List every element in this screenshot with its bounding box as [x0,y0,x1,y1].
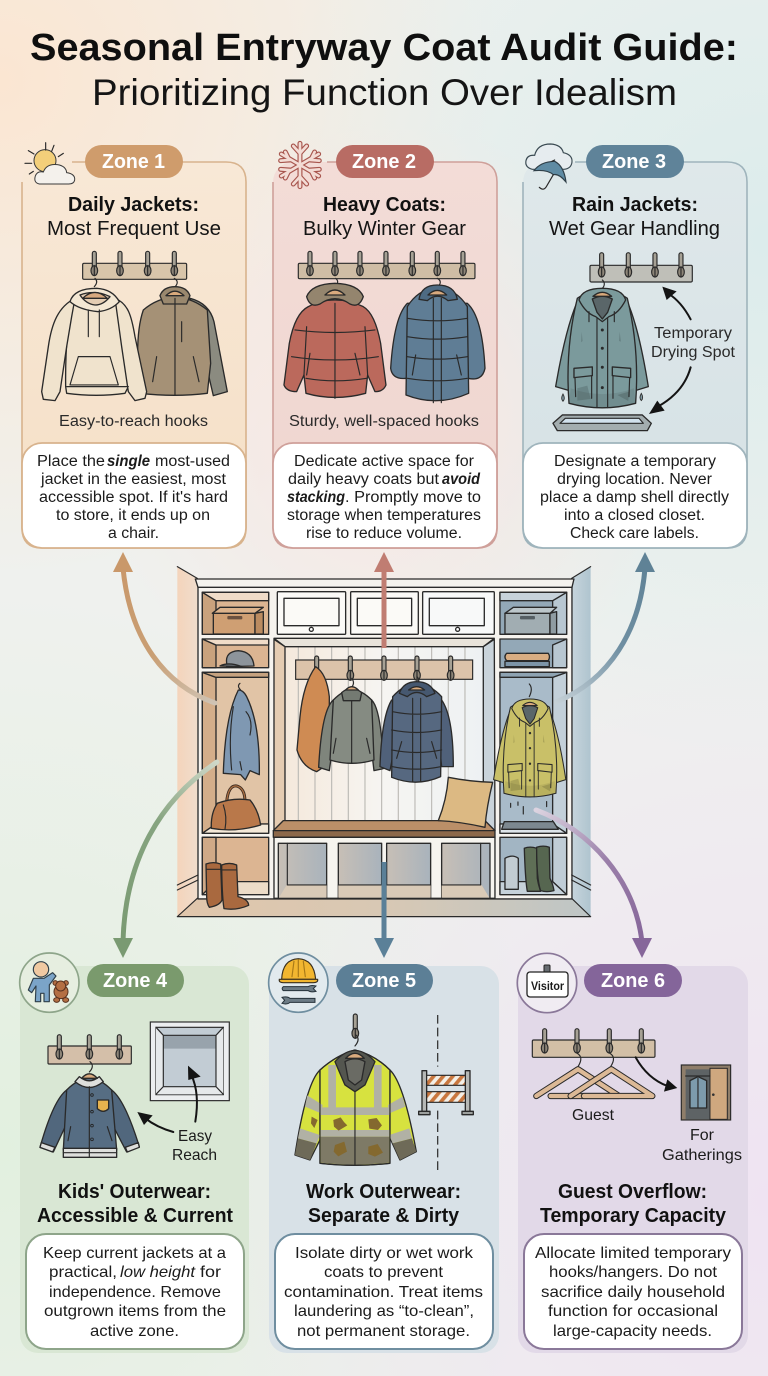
zone 4 message: for [200,1264,222,1281]
zone 1 heading: Daily Jackets: [68,193,199,216]
illustration: hook rail with hoodie and jacket [42,251,227,401]
easy reach label: Easy [178,1128,212,1145]
zone 5 message: laundering as “to-clean”, [294,1303,474,1320]
arrow: to zone 2 [374,552,394,648]
arrow: to zone 1 [113,552,215,703]
zone 6 message: large-capacity needs. [553,1323,712,1340]
zone 5 heading: Separate & Dirty [308,1204,460,1227]
zone 2 message: rise to reduce volume. [306,525,462,542]
grey jacket [319,678,383,771]
green boots [524,846,554,892]
zone 2 heading: Heavy Coats: [323,193,446,216]
zone 3 badge: Zone 3 [602,151,666,173]
arrow: to zone 6 [536,810,652,958]
divider and safety barrier [419,1015,473,1171]
zone 6 heading [540,1180,727,1227]
panel: zone 3 rain jackets [523,144,747,548]
zone 2 message: avoid [442,471,480,488]
zone 6 badge [584,964,682,997]
zone 3 badge [586,145,684,178]
panel: zone 6 guest overflow [517,953,748,1353]
panel: zone 2 heavy coats [273,143,497,548]
zone 4 message: low height [120,1264,196,1281]
grey storage box [505,607,557,634]
zone 4 message [26,1234,244,1349]
arrow: to zone 4 [113,762,217,958]
zone 3 heading [549,193,720,240]
title [30,27,738,113]
cubby [150,1022,229,1101]
zone 2 message: Dedicate active space for [294,453,474,470]
zone 4 badge [87,964,184,997]
icon: sun and cloud [25,143,75,184]
zone 1 message: most-used [155,453,230,470]
zone 2 message: stacking [287,489,345,506]
zone 2 message [273,443,497,548]
right storage column [494,592,567,895]
coat wall and rail [274,638,495,831]
zone 2 message: storage when temperatures [287,507,481,524]
guest labels: Gatherings [662,1147,742,1164]
illustration: hook rail with puffer coats [284,251,485,403]
zone 4 message: active zone. [90,1323,179,1340]
leather bag [211,786,261,830]
illustration: hi-vis work jacket [295,1014,416,1165]
zone 3 heading: Wet Gear Handling [549,217,720,240]
drying spot label: Drying Spot [651,344,736,361]
zone 5 message: contamination. Treat items [284,1284,483,1301]
zone 1 message: to store, it ends up on [56,507,210,524]
zone 1 heading: Most Frequent Use [47,217,221,240]
zone 1 message: a chair. [108,525,159,542]
zone 4 message: practical, [49,1264,117,1281]
zone 1 badge [85,145,183,178]
guest labels [572,1107,742,1164]
zone 5 heading [306,1180,461,1227]
yellow raincoat [494,684,566,814]
easy reach label [172,1128,217,1164]
illustration: kids jacket, low hooks and cubby [40,1022,229,1157]
zone 1 message [22,443,246,548]
icon: visitor badge [517,953,577,1013]
central mudroom illustration [177,567,591,917]
zone 2 heading: Bulky Winter Gear [303,217,466,240]
zone 1 heading [47,193,221,240]
storage box [212,607,263,634]
title: Seasonal Entryway Coat Audit Guide: [30,27,738,69]
zone 5 message: not permanent storage. [297,1323,470,1340]
zone 3 message: drying location. Never [557,471,712,488]
icon: child and teddy bear [20,953,79,1012]
hook caption: Sturdy, well-spaced hooks [289,413,479,430]
zone 5 message [275,1234,493,1349]
zone 2 badge [336,145,434,178]
zone 1 message: jacket in the easiest, most [40,471,227,488]
zone 2 badge: Zone 2 [352,151,416,173]
bench [273,821,495,898]
zone 3 message: Check care labels. [570,525,699,542]
zone 6 message: hooks/hangers. Do not [549,1264,718,1281]
zone 2 heading [303,193,466,240]
zone 4 heading: Kids' Outerwear: [58,1180,211,1203]
zone 6 message: sacrifice daily household [541,1284,725,1301]
zone 1 badge: Zone 1 [102,151,165,173]
zone 5 message: coats to prevent [324,1264,444,1281]
zone 3 message: Designate a temporary [554,453,716,470]
title: Prioritizing Function Over Idealism [92,72,677,113]
zone 4 message: independence. Remove [49,1284,221,1301]
zone 5 message: Isolate dirty or wet work [295,1245,474,1262]
zone 1 message: Place the [37,453,105,470]
zone 3 message: place a damp shell directly [540,489,729,506]
zone 6 message: function for occasional [548,1303,718,1320]
guest labels: Guest [572,1107,615,1124]
guest labels: For [690,1127,715,1144]
zone 6 message: Allocate limited temporary [535,1245,731,1262]
top cabinets [277,592,494,634]
zone 2 message: . Promptly move to [345,489,481,506]
bench cushion [438,777,493,827]
zone 3 message: into a closed closet. [564,507,705,524]
orange coat [297,667,329,772]
illustration: rain jacket, tray and drying arrows [553,253,692,431]
left storage column [202,592,269,909]
hanging blue jacket [223,683,259,780]
icon: snowflake [281,143,319,187]
zone 6 message [524,1234,742,1349]
brown boots [206,863,249,909]
zone 1 message: accessible spot. If it's hard [39,489,228,506]
zone 3 message [523,443,747,548]
panel: zone 4 kids outerwear [20,953,249,1353]
zone 1 message: single [107,453,150,470]
hook caption: Easy-to-reach hooks [59,413,208,430]
drying spot label: Temporary [654,325,732,342]
arrow: to zone 3 [556,552,655,702]
zone 2 message: daily heavy coats but [288,471,440,488]
zone 6 heading: Temporary Capacity [540,1204,727,1227]
drying spot label [651,325,736,361]
folded towels [505,653,549,667]
zone 4 heading: Accessible & Current [37,1204,233,1227]
easy reach label: Reach [172,1147,217,1164]
drip tray [502,822,558,829]
dark puffer coat [380,677,453,782]
zone 6 heading: Guest Overflow: [558,1180,707,1203]
panel: zone 1 daily jackets [22,143,246,548]
zone 6 badge: Zone 6 [601,970,665,992]
zone 5 heading: Work Outerwear: [306,1180,461,1203]
zone 3 heading: Rain Jackets: [572,193,698,216]
zone 5 badge [336,964,433,997]
panel: zone 5 work outerwear [269,953,499,1353]
icon: visitor badge: Visitor [531,981,564,993]
zone 4 message: outgrown items from the [44,1303,226,1320]
zone 4 badge: Zone 4 [103,970,168,992]
icon: hard hat and wrenches [269,953,328,1012]
illustration: guest hangers and closet [532,1029,731,1120]
icon: rain cloud and umbrella [526,144,572,189]
arrow: to zone 5 [374,862,394,958]
cap [220,651,254,667]
zone 4 heading [37,1180,233,1227]
zone 5 badge: Zone 5 [352,970,416,992]
umbrella stand [505,856,518,889]
zone 4 message: Keep current jackets at a [43,1245,226,1262]
